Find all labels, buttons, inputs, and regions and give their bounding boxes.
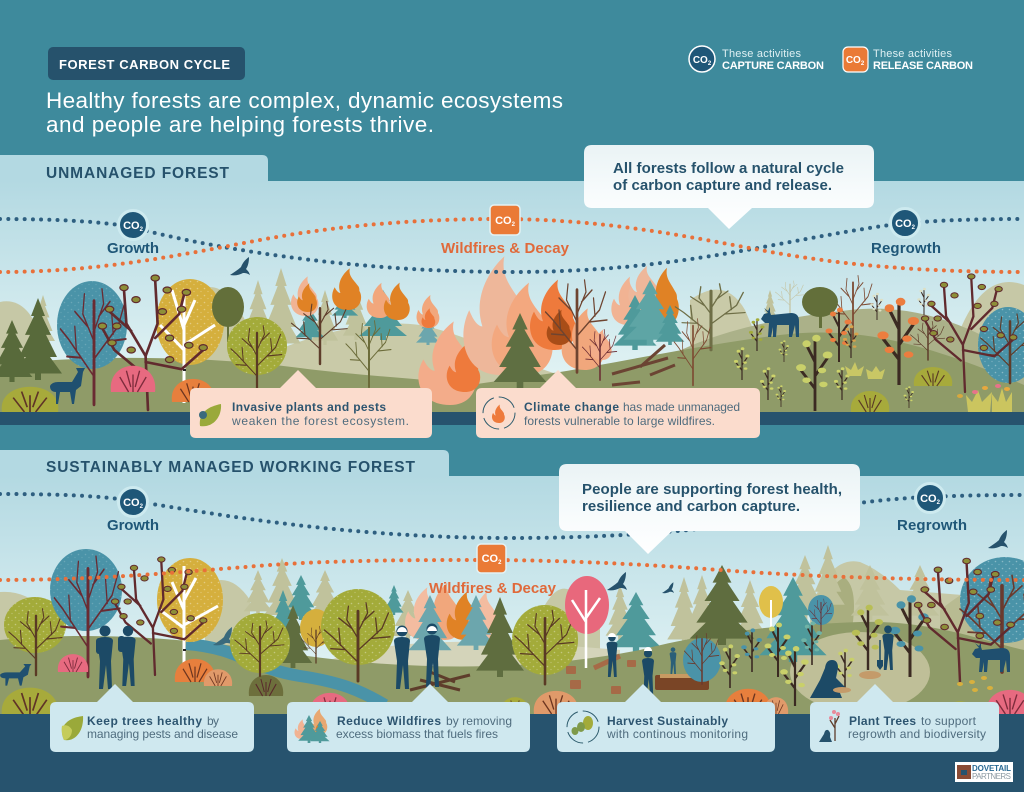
soil mounds: [833, 671, 881, 693]
sky: [0, 181, 1024, 412]
CO2 badge: growth: [107, 488, 159, 534]
CO2 badge: wildfires and decay: CO: [495, 215, 512, 227]
info box: plant trees: regrowth and biodiversity: [848, 727, 986, 741]
CO2 badge: wildfires and decay: [429, 544, 557, 597]
info box: reduce wildfires: [287, 684, 530, 752]
flowers right: [957, 384, 1012, 412]
tree: pink: [565, 576, 609, 668]
background conifers: [244, 545, 939, 645]
CO2 badge: regrowth: Regrowth: [897, 517, 967, 534]
bushes and grass right: [845, 362, 952, 412]
tree: blue small: [683, 633, 721, 684]
icon: moose: [972, 642, 1010, 672]
callout: people supporting: [559, 464, 860, 554]
info box: plant trees: to support: [921, 714, 977, 728]
info box: invasive plants: [190, 370, 432, 438]
background hills: [0, 282, 1024, 400]
info box: reduce wildfires: excess biomass that fuels fires: [336, 727, 498, 741]
info box: harvest sustainably: Harvest Sustainably: [607, 714, 728, 728]
bushes right: [501, 689, 1024, 714]
carbon capture dotted line: [0, 219, 1024, 272]
tree: dark olive: [212, 287, 244, 342]
stumps: [566, 660, 636, 694]
workers and slash pile: [394, 624, 470, 690]
tree: olive center: [512, 605, 578, 684]
tree: leafy maroon: [98, 275, 207, 410]
flowers right: [957, 676, 993, 692]
ground: [0, 622, 1024, 714]
legend: release carbon: CO: [846, 55, 861, 66]
birds: [607, 530, 1008, 593]
CO2 badge: regrowth: 2: [912, 225, 916, 231]
icon: small bird on ground: [213, 627, 233, 645]
tree: yellow small: [300, 609, 332, 663]
CO2 badge: wildfires and decay: CO: [482, 553, 498, 565]
legend: release carbon: [843, 47, 973, 72]
logo: Dovetail Partners: PARTNERS: [972, 772, 1011, 781]
legend: capture carbon: These activities: [722, 48, 802, 60]
woman planting: [810, 660, 848, 698]
tree: leafy right: [921, 274, 1017, 392]
background hills: [0, 561, 1024, 690]
CO2 badge: regrowth: CO: [895, 218, 912, 230]
tree: large olive: [321, 589, 395, 681]
logo: Dovetail Partners: DOVETAIL: [972, 764, 1011, 773]
CO2 badge: regrowth: [871, 208, 941, 257]
icon: moose: [761, 307, 799, 337]
CO2 badge: wildfires and decay: [441, 205, 570, 257]
tree: blue: [50, 549, 122, 676]
title badge: [48, 47, 245, 80]
sky: [0, 476, 1024, 714]
info box: climate change: Climate change: [524, 400, 619, 414]
legend: capture carbon: CO: [693, 55, 708, 66]
icon: burning trees: [295, 709, 330, 743]
flames in background: [405, 583, 499, 655]
ground: [0, 332, 1024, 412]
headline: and people are helping forests thrive.: [46, 112, 434, 137]
section tab: working forest: [0, 450, 449, 476]
CO2 badge: wildfires and decay: 2: [498, 560, 502, 566]
headline: [46, 88, 563, 137]
info box: plant trees: [810, 684, 999, 752]
info box: keep trees healthy: managing pests and disease: [87, 727, 238, 741]
CO2 badge: growth: 2: [140, 227, 144, 233]
saplings: [734, 288, 945, 411]
workers and log pile: [594, 633, 709, 697]
icon: cycle with flame: [483, 397, 515, 429]
tree: blue right: [978, 307, 1024, 383]
background tan conifers: [31, 268, 777, 350]
tree: blue large right: [960, 557, 1024, 672]
fire on teal conifers: [611, 266, 684, 350]
callout: natural cycle: [584, 145, 874, 229]
callout: people supporting: resilience and carbon capture.: [582, 498, 800, 515]
legend: release carbon: RELEASE CARBON: [873, 60, 973, 72]
legend: capture carbon: CAPTURE CARBON: [722, 60, 824, 72]
conifer: dark: [274, 565, 754, 677]
tree: yellow birch: [156, 279, 224, 403]
left conifers: [0, 298, 62, 382]
section heading: UNMANAGED FOREST: [46, 165, 230, 182]
CO2 badge: wildfires and decay: 2: [512, 222, 516, 228]
panel: unmanaged forest: [0, 155, 1024, 425]
info box: harvest sustainably: with continous monitoring: [606, 727, 748, 741]
info box: climate change: [476, 370, 760, 438]
CO2 badge: growth: [107, 210, 159, 257]
ground highlight: [790, 632, 930, 712]
large wildfire: [418, 256, 617, 405]
carbon release dotted line: [0, 219, 1024, 272]
info box: plant trees: Plant Trees: [849, 714, 916, 728]
info box: reduce wildfires: Reduce Wildfires: [337, 714, 441, 728]
title badge: FOREST CARBON CYCLE: [59, 57, 230, 72]
CO2 badge: regrowth: CO: [920, 493, 937, 505]
callout: people supporting: People are supporting forest health,: [582, 481, 842, 498]
CO2 badge: regrowth: [897, 484, 967, 534]
conifer: teal: [759, 577, 827, 662]
tree: leafy right: [914, 558, 1014, 682]
CO2 badge: wildfires and decay: Wildfires & Decay: [429, 580, 557, 597]
dark footer band: [0, 714, 1024, 792]
section heading: SUSTAINABLY MANAGED WORKING FOREST: [46, 459, 416, 476]
panel: sustainably managed working forest: [0, 450, 1024, 792]
logo: Dovetail Partners: [955, 762, 1013, 782]
icon: cycle with trees: [567, 711, 599, 743]
carbon capture dotted line: [0, 494, 1024, 538]
tree: dark olive right: [802, 287, 838, 328]
CO2 badge: regrowth: Regrowth: [871, 240, 941, 257]
CO2 badge: regrowth: 2: [937, 500, 941, 506]
burning trees: [291, 268, 440, 387]
CO2 badge: growth: CO: [123, 497, 140, 509]
saplings: [719, 595, 929, 706]
legend: release carbon: These activities: [873, 48, 952, 60]
tree: olive left: [4, 597, 66, 675]
CO2 badge: growth: CO: [123, 220, 140, 232]
info box: keep trees healthy: [50, 684, 254, 752]
tree: leafy maroon: [111, 557, 207, 675]
icon: planting: [819, 710, 840, 742]
info box: keep trees healthy: by: [207, 714, 219, 728]
tree: yellow small right: [759, 586, 783, 630]
info box: invasive plants: weaken the forest ecosystem.: [231, 414, 409, 428]
bare and broken trees: [612, 276, 873, 385]
tree: olive: [230, 613, 290, 676]
tree: blue: [57, 281, 127, 404]
CO2 badge: growth: Growth: [107, 240, 159, 257]
info box: climate change: has made unmanaged: [623, 400, 740, 414]
info box: invasive plants: Invasive plants and pests: [232, 400, 386, 414]
info box: harvest sustainably: [557, 684, 775, 752]
info box: keep trees healthy: Keep trees healthy: [87, 714, 202, 728]
stream: [186, 644, 385, 705]
info box: reduce wildfires: by removing: [446, 714, 512, 728]
legend: release carbon: 2: [861, 61, 865, 67]
tree: olive round: [227, 317, 287, 392]
icon: deer: [50, 368, 85, 404]
CO2 badge: growth: Growth: [107, 517, 159, 534]
callout: natural cycle: of carbon capture and release.: [613, 177, 832, 194]
headline: Healthy forests are complex, dynamic ecosystems: [46, 88, 563, 113]
icon: leaf and pest: [199, 404, 221, 426]
CO2 badge: wildfires and decay: Wildfires & Decay: [441, 240, 570, 257]
section tab: unmanaged forest: [0, 155, 268, 181]
carbon release dotted line: [0, 560, 1024, 580]
icon: leaves: [62, 716, 83, 740]
icon: bird: [230, 257, 250, 275]
CO2 badge: growth: 2: [140, 504, 144, 510]
info box: climate change: forests vulnerable to large wildfires.: [524, 414, 715, 428]
legend: capture carbon: 2: [708, 61, 712, 67]
legend: capture carbon: [689, 46, 824, 72]
tree: yellow birch: [157, 558, 223, 682]
bushes left: [2, 366, 214, 412]
man with shovel: [877, 626, 894, 670]
teal conifers: [269, 575, 661, 652]
dark band: [0, 412, 1024, 425]
icon: wolf: [0, 664, 32, 686]
callout: natural cycle: All forests follow a natural cycle: [613, 160, 844, 177]
tree: blue right small: [808, 595, 834, 632]
hikers: [96, 626, 136, 689]
bushes left: [2, 654, 350, 716]
